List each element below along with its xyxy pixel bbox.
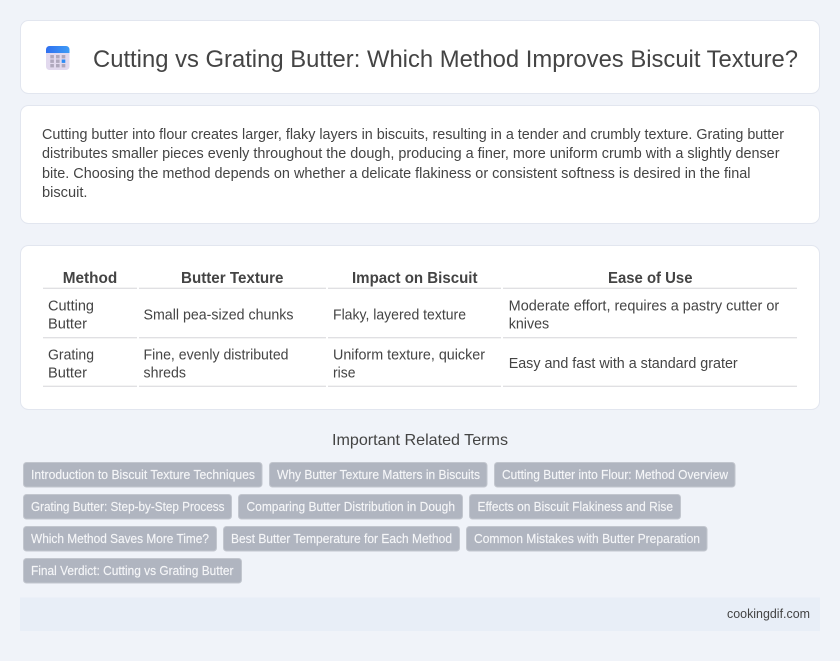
table row: cutting butter: Butter bbox=[48, 316, 87, 332]
table row: cutting butter bbox=[48, 298, 779, 332]
chip: best temperature bbox=[224, 526, 460, 551]
chip: final verdict bbox=[24, 558, 242, 583]
icon: calendar bbox=[46, 46, 70, 70]
chip: cutting butter into flour bbox=[494, 462, 735, 487]
table row: grating butter: shreds bbox=[144, 365, 186, 381]
table row: grating butter bbox=[48, 348, 738, 381]
table header row bbox=[63, 270, 693, 287]
chip: final verdict: Final Verdict: Cutting vs Grating Butter bbox=[31, 563, 234, 578]
chip: grating butter: Grating Butter: Step-by-Step Process bbox=[31, 499, 225, 514]
chip: common mistakes bbox=[466, 526, 707, 551]
table row: grating butter: Easy and fast with a standard grater bbox=[509, 356, 738, 372]
related terms chips bbox=[24, 462, 735, 583]
chip: saves time: Which Method Saves More Time? bbox=[31, 531, 209, 546]
chip: common mistakes: Common Mistakes with Butter Preparation bbox=[474, 531, 700, 546]
table header row: Ease of Use bbox=[608, 270, 693, 287]
chip: why butter texture matters bbox=[270, 462, 487, 487]
chip: best temperature: Best Butter Temperature for Each Method bbox=[231, 531, 452, 546]
intro paragraph: Cutting butter into flour creates larger, flaky layers in biscuits, resulting in a tender and crumbly texture. Grating butter bbox=[42, 127, 784, 143]
chip: cutting butter into flour: Cutting Butter into Flour: Method Overview bbox=[502, 467, 729, 482]
chip: effects on flakiness: Effects on Biscuit Flakiness and Rise bbox=[478, 499, 673, 514]
table row: grating butter: Fine, evenly distributed bbox=[144, 348, 288, 364]
table row: grating butter: Grating bbox=[48, 348, 94, 364]
footer bar bbox=[20, 598, 820, 631]
table row: cutting butter: knives bbox=[509, 316, 549, 332]
table row: cutting butter: Small pea-sized chunks bbox=[144, 308, 294, 324]
footer source: cookingdif.com bbox=[727, 607, 810, 621]
panel: title header bbox=[20, 20, 820, 94]
table row: grating butter: Uniform texture, quicker bbox=[333, 348, 485, 364]
chip: introduction: Introduction to Biscuit Texture Techniques bbox=[31, 467, 255, 482]
table header row: Impact on Biscuit bbox=[352, 270, 478, 287]
chip: introduction bbox=[24, 462, 262, 487]
chip: grating butter bbox=[24, 494, 232, 519]
panel: introduction bbox=[20, 106, 820, 224]
intro paragraph: distributes smaller pieces evenly throughout the dough, producing a finer, more uniform crumb with a slightly denser bbox=[42, 146, 780, 162]
chip: saves time bbox=[24, 526, 216, 551]
table row: grating butter: Butter bbox=[48, 365, 87, 381]
intro paragraph bbox=[42, 127, 784, 201]
chip: comparing distribution bbox=[238, 494, 462, 519]
panel: comparison table bbox=[20, 246, 820, 410]
table header row: Butter Texture bbox=[181, 270, 284, 287]
table row: cutting butter: Flaky, layered texture bbox=[333, 308, 466, 324]
intro paragraph: biscuit. bbox=[42, 185, 88, 201]
table row: cutting butter: Moderate effort, requires a pastry cutter or bbox=[509, 298, 779, 314]
table row: grating butter: rise bbox=[333, 365, 356, 381]
chip: why butter texture matters: Why Butter Texture Matters in Biscuits bbox=[277, 467, 480, 482]
chip: comparing distribution: Comparing Butter Distribution in Dough bbox=[246, 499, 455, 514]
table header row: Method bbox=[63, 270, 117, 287]
chip: effects on flakiness bbox=[470, 494, 680, 519]
table row: cutting butter: Cutting bbox=[48, 298, 94, 314]
title: Cutting vs Grating Butter: Which Method Improves Biscuit Texture? bbox=[93, 46, 798, 73]
intro paragraph: bite. Choosing the method depends on whether a delicate flakiness or consistent softness is desired in the final bbox=[42, 166, 751, 182]
related terms heading: Important Related Terms bbox=[332, 432, 508, 449]
